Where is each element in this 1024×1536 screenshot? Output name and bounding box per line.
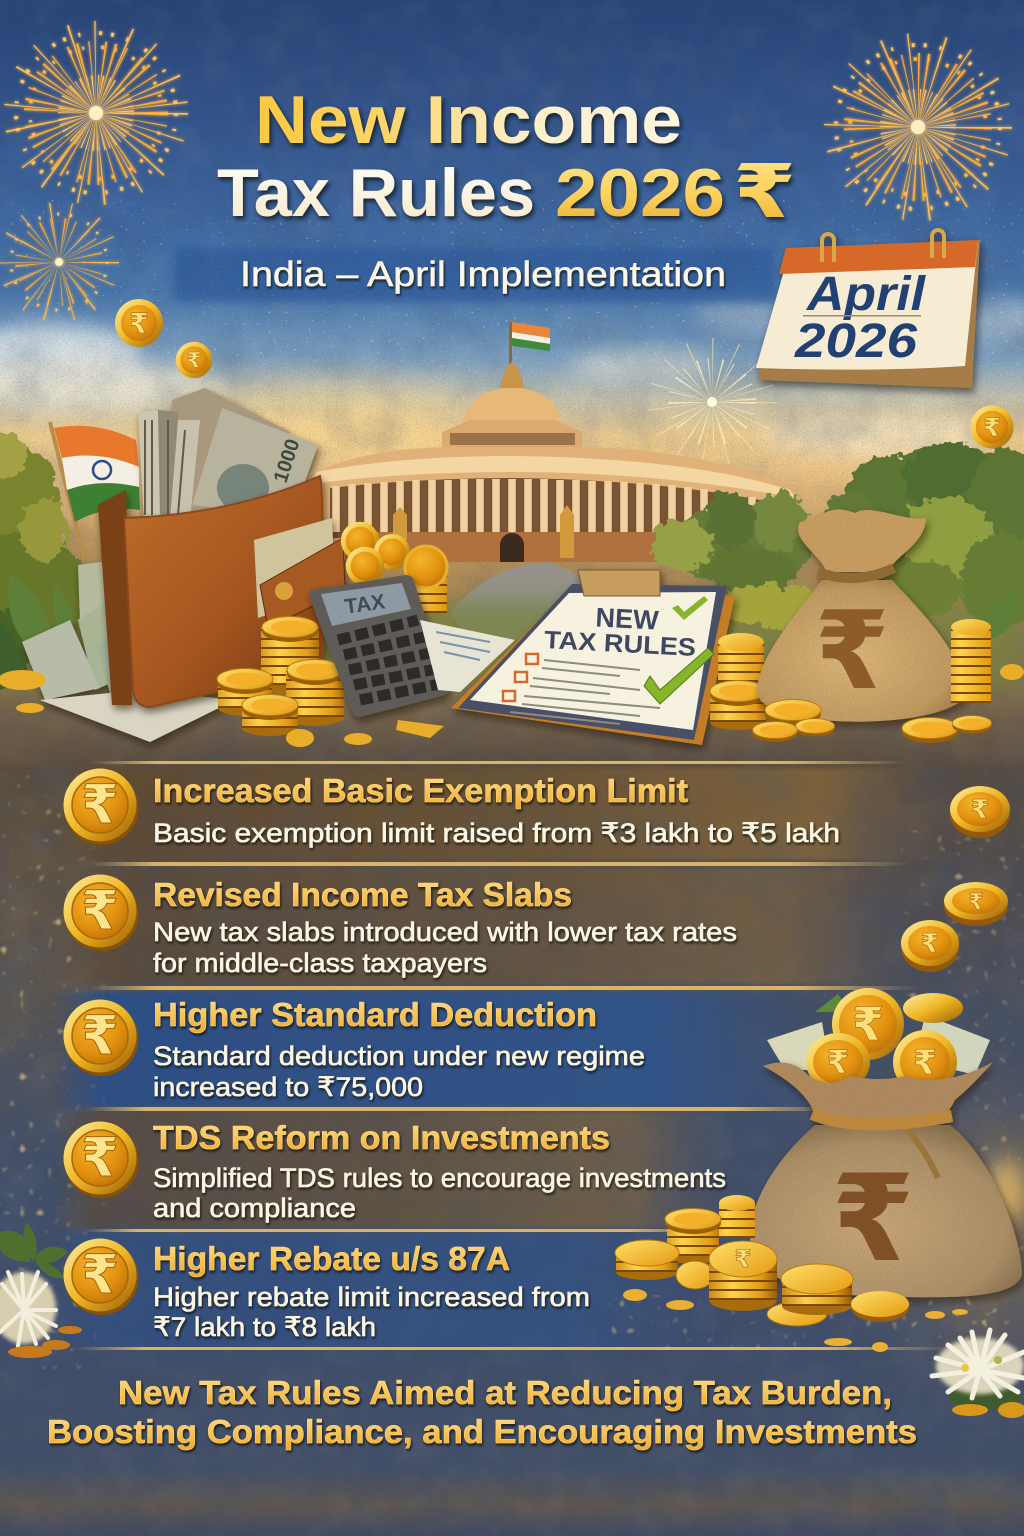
item text: ₹7 lakh to ₹8 lakh (153, 1312, 376, 1342)
item text: Simplified TDS rules to encourage investments (153, 1163, 726, 1193)
bag contents (767, 988, 990, 1094)
coin stack (719, 1195, 755, 1238)
coin right of sky (970, 405, 1014, 449)
clipboard heading: NEW (595, 602, 660, 636)
coin (952, 716, 992, 734)
coins bottom stacks (615, 1195, 909, 1326)
coin icon (64, 1238, 138, 1315)
coin (753, 722, 797, 742)
banknotes in wallet: 1000 (270, 436, 305, 486)
coin icon: ₹ (81, 881, 119, 941)
coin stacks centre right (710, 633, 766, 730)
coin icon: ₹ (81, 1245, 119, 1305)
trees right (652, 442, 1024, 628)
coin: ₹ (921, 928, 939, 958)
coin (903, 993, 963, 1023)
coin stack (710, 680, 766, 730)
footer statement: New Tax Rules Aimed at Reducing Tax Burden, (118, 1374, 892, 1411)
subtitle: India – April Implementation (240, 255, 726, 294)
coin stack (615, 1240, 679, 1280)
leaves (0, 575, 1020, 690)
calendar rings (822, 230, 944, 262)
coin: ₹ (971, 794, 989, 824)
flowers bottom left (0, 1222, 82, 1358)
panel: item 4 (64, 1119, 726, 1223)
coin (806, 1033, 870, 1091)
item heading: Revised Income Tax Slabs (153, 876, 572, 913)
calendar (756, 230, 980, 388)
item text: and compliance (153, 1193, 356, 1223)
coin (832, 988, 904, 1060)
coin stack (951, 619, 991, 703)
coin (950, 786, 1010, 838)
banknotes in wallet (138, 388, 318, 520)
checklist (503, 654, 538, 701)
form sheets (420, 620, 515, 692)
footer statement: Boosting Compliance, and Encouraging Investments (47, 1413, 917, 1450)
coin (893, 1030, 957, 1094)
gold sparkles (0, 770, 1024, 1370)
coins behind calculator (341, 522, 447, 613)
panel: item 5 (64, 1238, 590, 1342)
title year: 2026 (555, 155, 725, 231)
flag left (50, 422, 140, 558)
row bands (0, 761, 1024, 1536)
title line 1: New Income (255, 82, 682, 158)
coin: ₹ (968, 889, 984, 914)
money bag bottom right (615, 988, 1022, 1352)
coin stack (286, 660, 344, 726)
bag rope (818, 568, 894, 578)
fireworks (11, 33, 1000, 434)
firework: top left (16, 33, 176, 193)
title (217, 82, 796, 233)
bag rupee: ₹ (814, 590, 890, 711)
clipboard clip (578, 570, 660, 596)
gold pieces (952, 1404, 988, 1416)
coin stack (709, 1241, 777, 1311)
coin (901, 920, 959, 972)
check marks (644, 648, 714, 704)
coin: ₹ (852, 998, 884, 1050)
bag body (750, 1062, 1022, 1297)
flowers bottom right (932, 1330, 1024, 1418)
money bag top right (757, 509, 966, 722)
coin stack (665, 1208, 721, 1264)
item heading: Increased Basic Exemption Limit (153, 772, 688, 809)
floating coins (115, 299, 212, 378)
item heading: Higher Rebate u/s 87A (153, 1240, 510, 1277)
rotunda (307, 447, 797, 560)
item text: for middle-class taxpayers (153, 948, 487, 978)
item heading: Higher Standard Deduction (153, 996, 597, 1033)
colonnade (336, 479, 768, 532)
item text: Basic exemption limit raised from ₹3 lakh to ₹5 lakh (153, 818, 840, 848)
dome (462, 387, 563, 425)
coin: ₹ (187, 349, 201, 373)
coin (902, 718, 958, 743)
calculator (310, 575, 448, 717)
item text: increased to ₹75,000 (153, 1072, 423, 1102)
calendar: 2026 (794, 315, 917, 368)
right side loose coins (901, 786, 1010, 972)
coin (765, 700, 821, 725)
coin icon (64, 1000, 138, 1076)
coin right of sky: ₹ (983, 414, 1001, 442)
title rupee: ₹ (733, 150, 796, 233)
trees and garden (0, 431, 1024, 690)
coin (944, 882, 1008, 926)
item text: New tax slabs introduced with lower tax rates (153, 917, 737, 947)
firework: lower left (11, 214, 107, 310)
road (450, 562, 590, 640)
gold flakes (623, 1289, 968, 1352)
coin stack (261, 616, 319, 694)
stacks left (217, 616, 344, 736)
item text: Higher rebate limit increased from (153, 1282, 590, 1312)
firework: top right (836, 45, 1000, 209)
building flag (509, 322, 550, 372)
title line 2: Tax Rules (217, 155, 535, 231)
coin icon: ₹ (81, 775, 119, 835)
coin stack (781, 1264, 853, 1315)
coin stack (217, 668, 273, 716)
panel: item 1 (64, 768, 840, 848)
calendar text: April (806, 268, 927, 321)
coin stack: ₹ (735, 1246, 751, 1273)
bag rope (812, 1114, 952, 1125)
coin (851, 1291, 909, 1322)
coin stack (242, 694, 298, 736)
coin icon: ₹ (81, 1128, 119, 1188)
coin icon (64, 768, 138, 845)
coin (346, 547, 384, 585)
panel: item 3 (64, 996, 645, 1102)
coin (767, 1302, 827, 1326)
coin stack (718, 633, 764, 682)
clipboard: TAX RULES (543, 626, 697, 662)
item text: Standard deduction under new regime (153, 1041, 645, 1071)
coin: ₹ (827, 1044, 849, 1080)
firework: centre right (680, 370, 744, 434)
coin icon: ₹ (81, 1006, 119, 1066)
wallet (98, 476, 345, 707)
trees left (0, 431, 86, 670)
coin: ₹ (913, 1044, 937, 1082)
item heading: TDS Reform on Investments (153, 1119, 610, 1156)
scattered coins upper (0, 619, 1024, 747)
calculator: TAX (343, 590, 387, 619)
coin icon (64, 1122, 138, 1198)
parliament building (307, 322, 797, 640)
coin: ₹ (129, 308, 149, 339)
footer statement (47, 1374, 917, 1450)
pillars (393, 505, 574, 558)
clipboard (451, 570, 735, 745)
coin icon (64, 874, 138, 951)
coin (795, 719, 835, 736)
coin (676, 1261, 714, 1289)
small gold pieces (0, 664, 1024, 747)
banknotes left (22, 558, 235, 742)
money pile left (22, 388, 515, 742)
bag rupee: ₹ (831, 1152, 915, 1286)
coin (341, 522, 379, 560)
subtitle (175, 248, 775, 302)
wallet strap (254, 518, 335, 618)
coin (374, 534, 410, 570)
panel: item 2 (64, 874, 737, 978)
coin stack (405, 546, 447, 613)
